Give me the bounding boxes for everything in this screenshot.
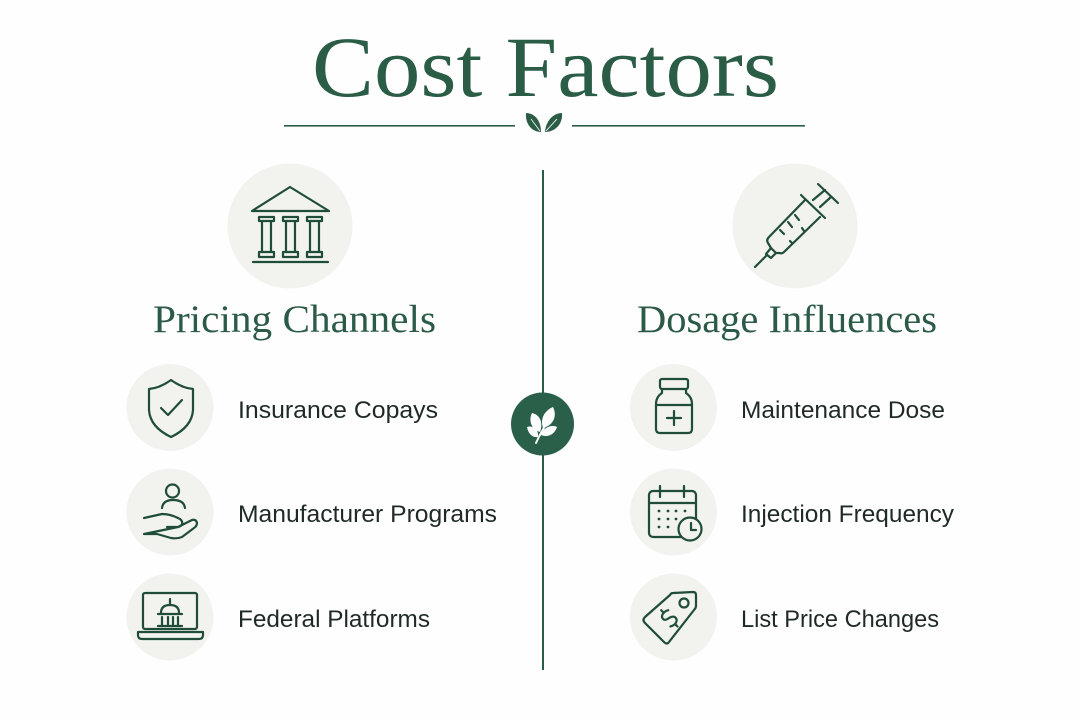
title: Cost Factors: [312, 19, 779, 115]
item: insurance copays: Insurance Copays: [238, 397, 438, 424]
item: federal platforms: Federal Platforms: [238, 606, 430, 633]
panel: dosage influences: [630, 164, 954, 660]
item: injection frequency: Injection Frequency: [741, 501, 954, 528]
item: manufacturer programs: [126, 468, 497, 556]
heading: pricing channels: Pricing Channels: [153, 298, 436, 341]
item: maintenance dose: Maintenance Dose: [741, 397, 945, 424]
item: manufacturer programs: Manufacturer Programs: [238, 501, 497, 528]
panel: pricing channels: [126, 164, 497, 660]
icon: bank building: [228, 164, 352, 288]
item: insurance copays: [126, 364, 438, 451]
item: list price changes: [630, 574, 939, 660]
title divider with leaves: [284, 113, 805, 132]
item: federal platforms: [126, 574, 430, 660]
item: maintenance dose: [630, 364, 945, 451]
item: list price changes: List Price Changes: [741, 606, 939, 633]
centre leaf badge: [511, 392, 574, 456]
item: injection frequency: [630, 468, 954, 556]
heading: dosage influences: Dosage Influences: [637, 298, 937, 341]
centre vertical divider: [542, 170, 544, 670]
icon: syringe: [732, 164, 858, 288]
